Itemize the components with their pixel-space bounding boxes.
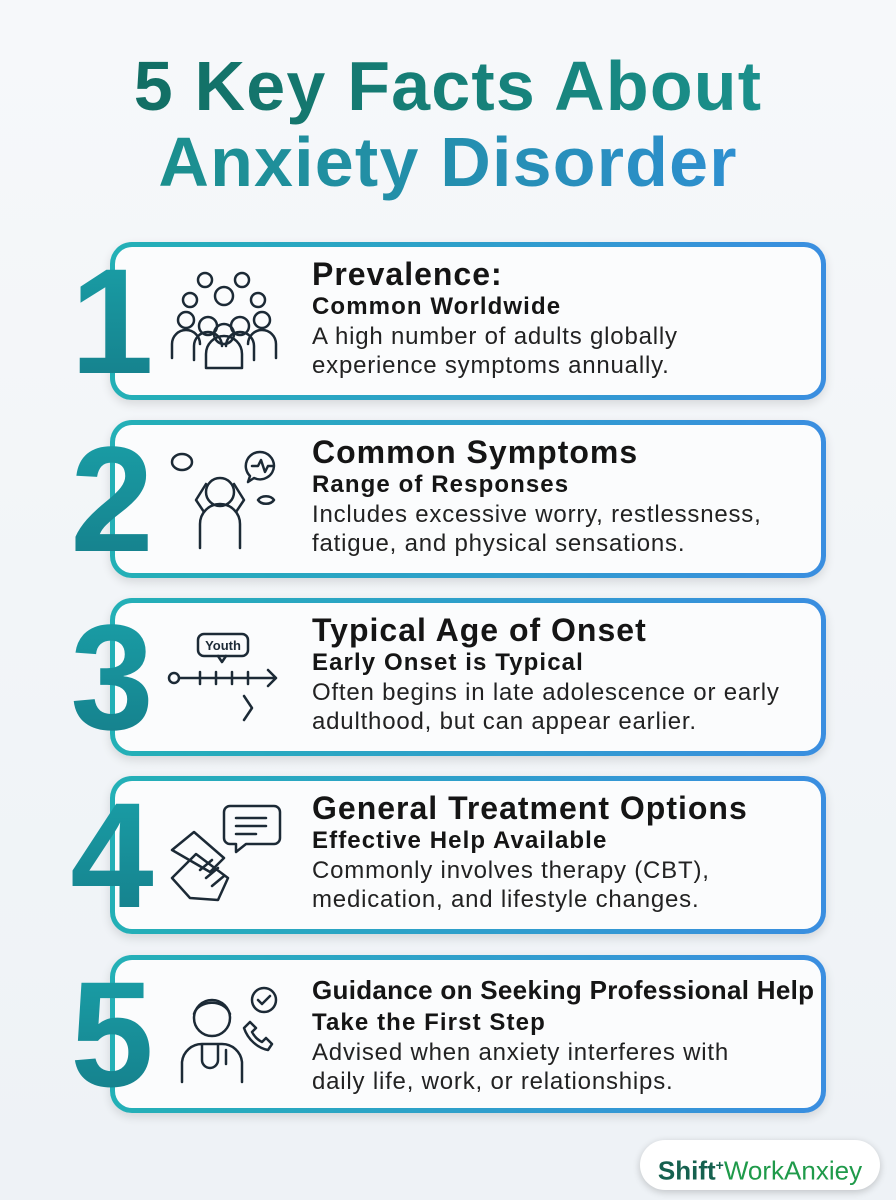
text: professional help: Advised when anxiety interferes with bbox=[312, 1039, 729, 1066]
icon: timeline bbox=[168, 632, 278, 722]
text: symptoms: Includes excessive worry, restlessness, bbox=[312, 501, 762, 528]
number 5: 5 bbox=[70, 950, 154, 1118]
logo bbox=[640, 1140, 880, 1190]
text: prevalence: Prevalence: bbox=[312, 256, 503, 292]
text: treatment bbox=[312, 790, 748, 913]
text: onset: Early Onset is Typical bbox=[312, 649, 584, 676]
icon: hands and chat bbox=[170, 804, 282, 902]
number 2: 2 bbox=[70, 415, 154, 583]
text: symptoms: fatigue, and physical sensations. bbox=[312, 530, 685, 557]
text: treatment: medication, and lifestyle changes. bbox=[312, 886, 699, 913]
icon: stressed person bbox=[170, 450, 276, 550]
text: professional help: daily life, work, or relationships. bbox=[312, 1068, 673, 1095]
title bbox=[134, 47, 762, 201]
panel: 2 symptoms bbox=[110, 420, 826, 578]
text: professional help bbox=[312, 975, 814, 1095]
number 3: 3 bbox=[70, 593, 154, 761]
text: onset: Often begins in late adolescence or early bbox=[312, 679, 780, 706]
text: treatment: Commonly involves therapy (CBT), bbox=[312, 857, 710, 884]
text: symptoms: Common Symptoms bbox=[312, 434, 638, 470]
text: prevalence: Common Worldwide bbox=[312, 293, 561, 320]
text: symptoms: Range of Responses bbox=[312, 471, 569, 498]
panel: 4 treatment bbox=[110, 776, 826, 934]
text: professional help: Take the First Step bbox=[312, 1009, 546, 1036]
panel: 1 prevalence bbox=[110, 242, 826, 400]
text: prevalence: A high number of adults globally bbox=[312, 323, 678, 350]
title: 5 Key Facts About bbox=[134, 47, 762, 125]
text: onset: Typical Age of Onset bbox=[312, 612, 647, 648]
number 1: 1 bbox=[70, 237, 154, 405]
panel: 5 professional help bbox=[110, 955, 826, 1113]
panel: 3 onset bbox=[110, 598, 826, 756]
text: professional help: Guidance on Seeking Professional Help bbox=[312, 975, 814, 1005]
text: onset bbox=[312, 612, 780, 735]
text: onset: adulthood, but can appear earlier. bbox=[312, 708, 697, 735]
text: prevalence: experience symptoms annually. bbox=[312, 352, 670, 379]
logo: Shift+WorkAnxiey bbox=[658, 1156, 862, 1186]
icon: timeline: Youth bbox=[205, 638, 241, 653]
text: prevalence bbox=[312, 256, 678, 379]
text: treatment: Effective Help Available bbox=[312, 827, 607, 854]
number 4: 4 bbox=[70, 771, 154, 939]
title: Anxiety Disorder bbox=[158, 123, 738, 201]
text: symptoms bbox=[312, 434, 762, 557]
icon: doctor with phone bbox=[180, 986, 278, 1084]
text: treatment: General Treatment Options bbox=[312, 790, 748, 826]
icon: group of people bbox=[170, 272, 278, 370]
